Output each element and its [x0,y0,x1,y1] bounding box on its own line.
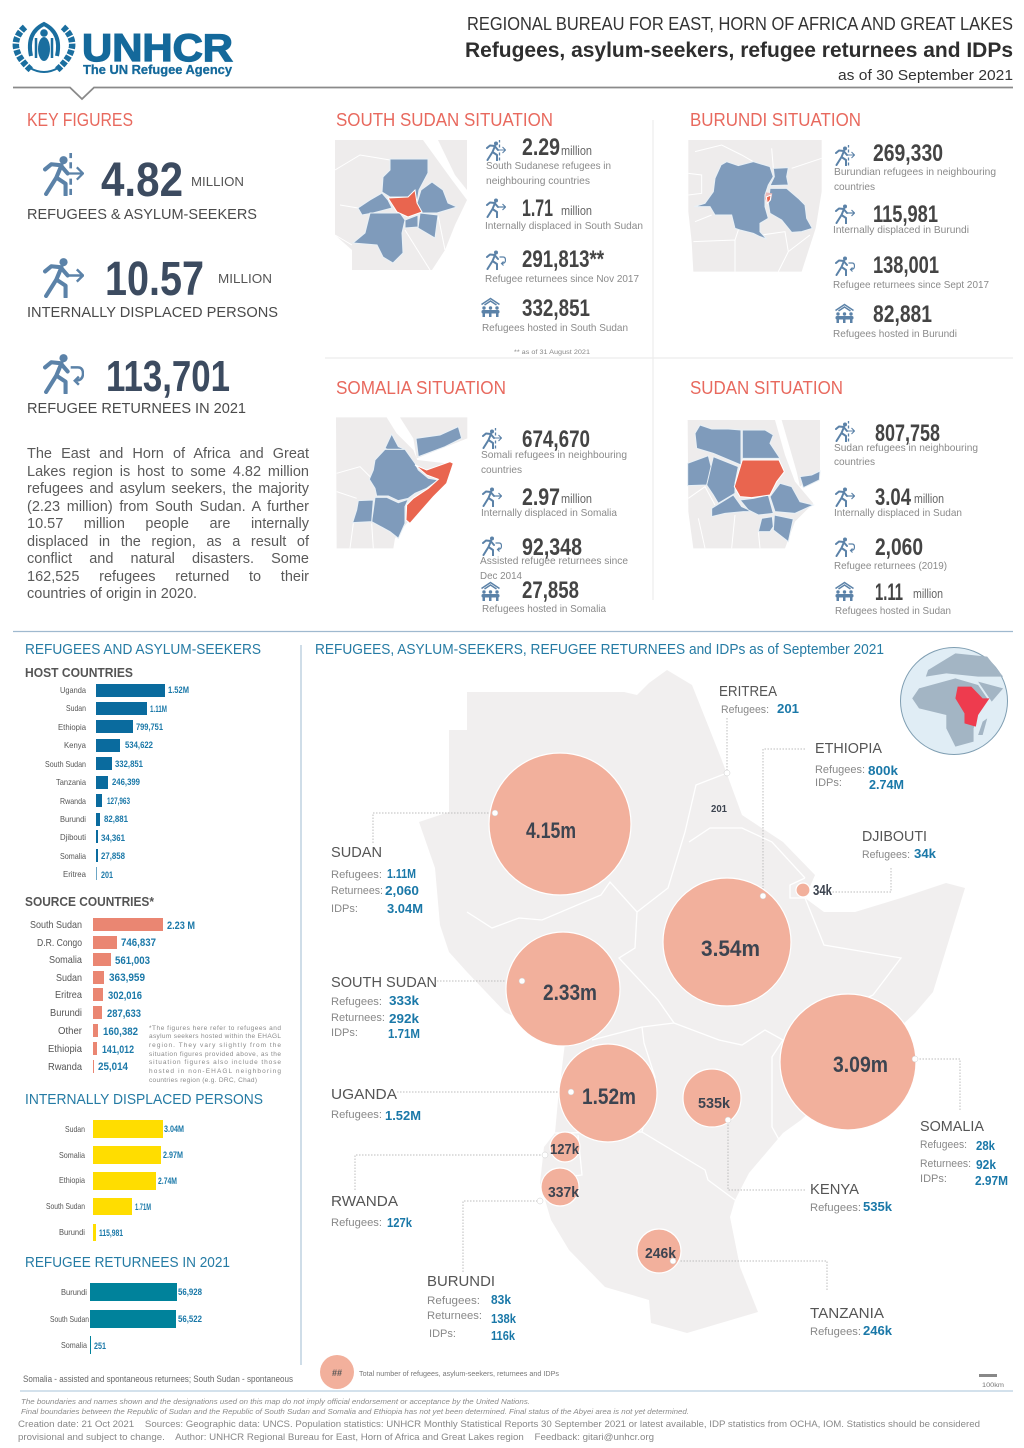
subheading: host countries: HOST COUNTRIES [25,665,133,680]
bar chart: host countries: 534,622 [125,740,153,750]
callout: Kenya: KENYA [810,1181,859,1198]
footnote: source countries note: asylum seekers hosted within the EHAGL [149,1033,281,1040]
stat: internally displaced [481,484,617,519]
stat: refugee returnees: 113,701 [106,352,230,401]
bar chart: source countries: 746,837 [121,937,156,949]
stat: refugees [834,140,996,193]
callout: Somalia [920,1118,1008,1188]
bubble values: 3.54m [701,936,760,961]
text block: regional summary: 162,525 refugees returned to their [27,568,309,584]
bubble values: 246k [645,1245,677,1262]
heading: REFUGEE RETURNEES IN 2021 [25,1254,230,1271]
scale bar [979,1374,1004,1389]
callout: Rwanda: RWANDA [331,1193,398,1210]
bar chart: host countries: 127,963 [107,796,130,806]
text block: regional summary: The East and Horn of Africa and Great [27,446,309,462]
footer: disclaimer and credits: provisional and subject to change. Author: UNHCR Regional Bureau for East, Horn of Africa and Great Lakes region Feedback: gitari@unhcr.org [18,1432,654,1443]
callout: Tanzania: 246k [863,1323,893,1338]
stat: internally displaced persons: MILLION [218,271,272,286]
callout: Kenya [810,1181,893,1214]
footnote: source countries note: countries region (e.g. DRC, Chad) [149,1077,257,1084]
subheading: source countries: SOURCE COUNTRIES* [25,894,155,909]
callout: Sudan: 1.11M [387,866,416,881]
bar chart: host countries: 34,361 [101,833,125,843]
callout: Uganda [331,1086,421,1123]
callout: Burundi: 83k [491,1292,512,1307]
heading: SUDAN SITUATION [690,378,843,398]
heading: REFUGEES AND ASYLUM-SEEKERS [25,641,261,658]
callout: Eritrea: Refugees: [721,704,769,716]
bar chart: returnees [50,1283,202,1354]
stat: hosted: Refugees hosted in Somalia [482,603,606,615]
stat: internally displaced: million [561,491,592,506]
bar chart: source countries: D.R. Congo [37,937,82,949]
stat: refugees: 674,670 [522,426,590,453]
bar chart: IDPs: 2.74M [158,1176,177,1186]
stat: refugees: Somali refugees in neighbouring [481,449,627,461]
bar chart: host countries: Tanzania [56,777,86,787]
text block: regional summary: refugees and asylum seekers, the majority [27,481,309,497]
map: Somalia [336,417,467,548]
stat: returnees: 138,001 [873,252,939,279]
text block: regional summary: countries of origin in 2020. [27,586,197,602]
callout: Uganda: Refugees: [331,1109,382,1121]
callout: Somalia: Refugees: [920,1139,967,1151]
callout: Burundi: Returnees: [427,1310,482,1322]
footnote: source countries note: situation figures provided above, as the [149,1051,281,1058]
bar chart: host countries: 1.52M [168,685,189,695]
footer: disclaimer and credits: Creation date: 21 Oct 2021 Sources: Geographic data: UNCS. Population statistics: UNHCR Monthly Statistical Reports 30 September 2021 or latest available, IDP statistics from OCHA, IOM. Statistics should be considered [18,1419,980,1430]
stat: refugees: 2.29 [522,134,560,161]
bar chart: source countries: 25,014 [98,1061,129,1073]
callout: Rwanda [331,1193,413,1230]
callout: Kenya: Refugees: [810,1202,861,1214]
bar chart: IDPs: 3.04M [164,1124,184,1134]
bar chart: source countries: 302,016 [108,990,142,1002]
inset: globe locator [900,648,1008,754]
callout: Somalia: 92k [976,1157,997,1172]
map: Burundi [688,140,822,272]
panel: refugees and asylum-seekers charts [25,641,281,1084]
callout: South Sudan: Returnees: [331,1012,385,1024]
legend: bubble size [320,1355,560,1389]
callout: Somalia: 28k [976,1138,996,1153]
stat: hosted: 1.11 [875,579,903,606]
callout: Burundi: BURUNDI [427,1273,495,1290]
date: as of 30 September 2021 [838,67,1013,84]
bubble values: 34k [813,882,832,899]
stat: returnees: Dec 2014 [480,570,522,582]
map: South Sudan [335,140,467,270]
callout: Sudan: IDPs: [331,903,358,915]
callout: Somalia: SOMALIA [920,1118,984,1135]
stat: refugees: neighbouring countries [486,175,590,187]
footnote: ** as of 31 August 2021 [514,350,591,356]
bar chart: IDPs: Somalia [59,1150,85,1160]
callout: Djibouti: 34k [914,846,937,861]
stat: refugees: million [561,143,592,158]
bar chart: host countries: 799,751 [136,722,163,732]
bar chart: host countries: Uganda [60,685,86,695]
callout: Ethiopia: Refugees: [815,764,865,776]
bar chart: IDPs: 115,981 [99,1228,123,1238]
bar chart: returnees: Burundi [61,1287,87,1297]
bar chart: returnees: South Sudan [50,1314,89,1324]
heading: SOMALIA SITUATION [336,378,506,398]
heading: BURUNDI SITUATION [690,110,861,130]
bar chart: IDPs: South Sudan [46,1201,85,1211]
stat: internally displaced: million [914,491,944,506]
bar chart: returnees: 251 [94,1341,106,1351]
bar chart: IDPs: 2.97M [163,1150,183,1160]
callout: Ethiopia: ETHIOPIA [815,740,882,757]
map: Sudan [688,420,820,548]
footer: disclaimer and credits: Final boundaries between the Republic of Sudan and the Republic of South Sudan and Somalia and Ethiopia has not yet been determined. Final status of the Abyei area is not yet determined. [21,1407,689,1416]
bar chart: source countries: Eritrea [55,989,82,1001]
bubble values: 2.33m [543,980,597,1005]
callout: Somalia: 2.97M [975,1173,1008,1188]
stat: hosted: Refugees hosted in Burundi [833,328,957,340]
proportional bubbles [489,753,916,1273]
stat: hosted [833,301,957,340]
callout: Sudan: 2,060 [385,883,419,898]
title block [465,14,1013,84]
footnote: source countries note: situation figures also include those [149,1059,281,1066]
callout: Uganda: 1.52M [385,1108,421,1123]
stat: hosted [835,579,951,617]
bar chart: host countries: Kenya [64,740,86,750]
stat: hosted: Refugees hosted in Sudan [835,605,951,617]
bubble values: 1.52m [582,1084,636,1109]
bubble values: 127k [550,1141,580,1158]
text block: regional summary: 10.57 million people are internally [27,516,309,532]
leader lines [355,718,960,1290]
panel: Somalia situation [336,378,628,615]
stat: returnees [834,534,947,572]
panel: internally displaced persons chart [25,1091,263,1241]
stat: hosted [482,577,606,615]
stat: refugees: countries [834,456,875,468]
bar chart: host countries: Burundi [60,814,86,824]
stat: refugees [834,420,978,468]
stat: returnees: 2,060 [875,534,923,561]
stat: refugees [481,426,627,476]
bar chart: IDPs: Burundi [59,1227,85,1237]
bar chart: host countries: 27,858 [101,851,125,861]
stat: returnees: 291,813** [522,246,605,273]
callout: Ethiopia: IDPs: [815,777,842,789]
stat: refugees and asylum-seekers [27,154,257,223]
icon: internally displaced [45,258,83,297]
panel: Sudan situation [688,378,978,617]
legend: bubble size: ## [332,1368,342,1378]
header: UNHCR logo [16,24,233,77]
callout: Kenya: 535k [863,1199,893,1214]
panel: South Sudan situation [335,110,643,356]
callout: Djibouti: DJIBOUTI [862,828,927,845]
callout: Tanzania [810,1305,893,1338]
bar chart: host countries: 201 [101,870,113,880]
stat: internally displaced: 1.71 [522,195,553,222]
stat: refugees: countries [481,464,522,476]
main map heading: REFUGEES, ASYLUM-SEEKERS, REFUGEE RETURNEES and IDPs as of September 2021 [315,641,884,658]
leader anchor dots [492,770,918,1264]
bar chart: source countries: Burundi [50,1007,82,1019]
note: returnees: Somalia - assisted and spontaneous returnees; South Sudan - spontaneous [23,1374,293,1384]
callout: Burundi: Refugees: [427,1295,480,1307]
panel: key figures [27,110,278,417]
stat: internally displaced persons [27,253,278,321]
stat: hosted: million [913,586,943,601]
stat: refugees and asylum-seekers: 4.82 [101,154,183,207]
callout: Eritrea: ERITREA [719,683,777,700]
stat: internally displaced: Internally displaced in Sudan [834,507,962,519]
stat: internally displaced: 115,981 [873,201,938,228]
bar chart: source countries: Other [58,1025,82,1037]
stat: internally displaced [834,484,962,519]
bar chart: host countries [45,684,189,880]
stat: internally displaced persons: INTERNALLY DISPLACED PERSONS [27,304,278,321]
stat: returnees [485,246,639,285]
stat: refugees: Burundian refugees in neighbouring [834,166,996,178]
stat: refugees: Sudan refugees in neighbouring [834,442,978,454]
stat: internally displaced: million [561,203,592,218]
text block: regional summary: displaced in the region, as a result of [27,534,309,550]
bar chart: host countries: 1.11M [150,704,167,714]
stat: returnees: Assisted refugee returnees since [480,555,628,567]
bar chart: source countries: 561,003 [115,955,150,967]
bar chart: host countries: Djibouti [60,832,86,842]
main title: Refugees, asylum-seekers, refugee returnees and IDPs [465,39,1013,62]
bar chart: source countries: 141,012 [102,1044,134,1056]
panel: Burundi situation [688,110,996,340]
bar chart: source countries: 2.23 M [167,920,195,932]
stat: returnees: Refugee returnees since Nov 2017 [485,273,639,285]
callout: South Sudan: 1.71M [388,1026,420,1041]
stat: hosted: Refugees hosted in South Sudan [482,322,628,334]
text block: regional summary: Lakes region is host to some 4.82 million [27,464,309,480]
stat: internally displaced: 3.04 [875,484,911,511]
stat: refugee returnees: REFUGEE RETURNEES IN 2021 [27,400,246,417]
bar chart: source countries: Somalia [49,954,82,966]
bar chart: source countries: 287,633 [107,1008,141,1020]
bar chart: host countries: 246,399 [112,777,140,787]
stat: hosted: 82,881 [873,301,932,328]
bar chart: host countries: Rwanda [60,796,86,806]
bar chart: host countries: South Sudan [45,759,86,769]
stat: hosted: 332,851 [522,295,590,322]
stat: hosted: 27,858 [522,577,579,604]
footnote: source countries note: region. They vary slightly from the [149,1042,281,1049]
callout: Burundi [427,1273,517,1343]
callout: Tanzania: Refugees: [810,1326,861,1338]
stat: returnees: Refugee returnees (2019) [834,560,947,572]
callout: Djibouti: Refugees: [862,849,910,861]
callout: Burundi: 116k [491,1328,516,1343]
bar chart: source countries: Sudan [56,972,82,984]
callout: Burundi: 138k [491,1311,517,1326]
bar chart: source countries: Ethiopia [48,1043,82,1055]
bar chart: source countries: 160,382 [103,1026,138,1038]
text block: regional summary [27,446,310,602]
bar chart: returnees: 56,522 [178,1314,202,1324]
bar chart: host countries: Ethiopia [58,722,86,732]
bar chart: IDPs: Ethiopia [59,1175,85,1185]
bubble values: 535k [698,1095,731,1112]
logo tagline: The UN Refugee Agency [83,62,233,77]
callout: Uganda: UGANDA [331,1086,397,1103]
bar chart: source countries: 363,959 [109,972,145,984]
bubble values: 201 [711,804,727,815]
callout: Ethiopia: 2.74M [869,777,904,792]
callout: South Sudan: 333k [389,993,420,1008]
stat: internally displaced [833,201,969,236]
footer: disclaimer and credits [18,1397,980,1443]
bar chart: returnees: 56,928 [178,1287,202,1297]
bar chart: IDPs: 1.71M [135,1202,151,1212]
callout: Rwanda: Refugees: [331,1217,382,1229]
bar chart: returnees: Somalia [61,1340,87,1350]
callout: South Sudan: 292k [389,1011,420,1026]
text block: regional summary: conflict and natural disasters. Some [27,551,309,567]
bar chart: IDPs: Sudan [65,1124,85,1134]
scale bar: 100km [982,1383,1004,1389]
bar chart: host countries: Somalia [60,851,86,861]
callout: Ethiopia [815,740,904,792]
heading: INTERNALLY DISPLACED PERSONS [25,1091,263,1108]
icon: refugees [45,153,83,195]
callout: South Sudan: SOUTH SUDAN [331,974,437,991]
stat: returnees [480,534,628,582]
stat: refugees [486,134,611,187]
text block: regional summary: (2.23 million) from South Sudan. A further [27,498,309,514]
callout: Djibouti [862,828,937,861]
bar chart: host countries: Sudan [66,703,86,713]
stat: refugees and asylum-seekers: REFUGEES & ASYLUM-SEEKERS [27,206,257,223]
icon: refugee returnees [45,354,83,393]
icon: UNHCR emblem [16,24,72,72]
logo wordmark: UNHCR [82,27,233,70]
heading: key figures: KEY FIGURES [27,110,133,130]
bar chart: source countries: Rwanda [48,1061,82,1073]
bar chart: source countries [30,918,195,1073]
stat: internally displaced [485,195,643,232]
callout: South Sudan: Refugees: [331,996,382,1008]
callout: Sudan: SUDAN [331,844,382,861]
footer: disclaimer and credits: The boundaries and names shown and the designations used on this map do not imply official endorsement or acceptance by the United Nations. [21,1397,530,1406]
panel: refugee returnees chart [23,1254,293,1384]
stat: refugees and asylum-seekers: MILLION [191,174,244,189]
bubble values: 4.15m [526,818,576,843]
callout: Eritrea [719,683,799,716]
footnote: source countries note: *The figures here refer to refugees and [149,1025,281,1032]
callout: Burundi: IDPs: [429,1328,456,1340]
stat: refugee returnees [27,352,246,417]
callout: South Sudan: IDPs: [331,1027,358,1039]
bar chart: host countries: Eritrea [63,869,86,879]
callout: Ethiopia: 800k [868,763,899,778]
stat: returnees: 92,348 [522,534,582,561]
callout: Sudan: Returnees: [331,885,383,897]
bar chart: host countries: 82,881 [104,814,128,824]
callout: Somalia: Returnees: [920,1158,971,1170]
legend: bubble size: Total number of refugees, asylum-seekers, returnees and IDPs [359,1371,560,1378]
stat: refugees: countries [834,181,875,193]
footnote: source countries note: hosted in non-EHAGL neighboring [149,1068,281,1075]
callout: Tanzania: TANZANIA [810,1305,884,1322]
bubble values [526,804,888,1262]
bar chart: source countries: South Sudan [30,919,82,931]
bar chart: host countries: 332,851 [115,759,143,769]
callout: Sudan: Refugees: [331,869,382,881]
stat: refugees: 269,330 [873,140,943,167]
stat: hosted [482,295,628,334]
heading: SOUTH SUDAN SITUATION [336,110,553,130]
stat: internally displaced: Internally displaced in Somalia [481,507,617,519]
stat: internally displaced: Internally displaced in Burundi [833,224,969,236]
main map: East, Horn of Africa and Great Lakes [355,670,965,1333]
footnote: source countries note [149,1025,281,1084]
callout: Sudan [331,844,423,916]
stat: refugees: 807,758 [875,420,940,447]
callout: Sudan: 3.04M [387,901,423,916]
stat: internally displaced: 2.97 [522,484,560,511]
stat: returnees: Refugee returnees since Sept 2017 [833,279,989,291]
callout: Eritrea: 201 [777,701,799,716]
stat: returnees [833,252,989,291]
callout: South Sudan [331,974,437,1041]
callout: Somalia: IDPs: [920,1173,947,1185]
bubble values: 3.09m [833,1052,888,1077]
stat: refugees: South Sudanese refugees in [486,160,611,172]
stat: internally displaced: Internally displaced in South Sudan [485,220,643,232]
bar chart: IDPs [46,1120,184,1241]
bubble values: 337k [548,1184,580,1201]
callout: Rwanda: 127k [387,1215,413,1230]
stat: internally displaced persons: 10.57 [105,253,204,306]
